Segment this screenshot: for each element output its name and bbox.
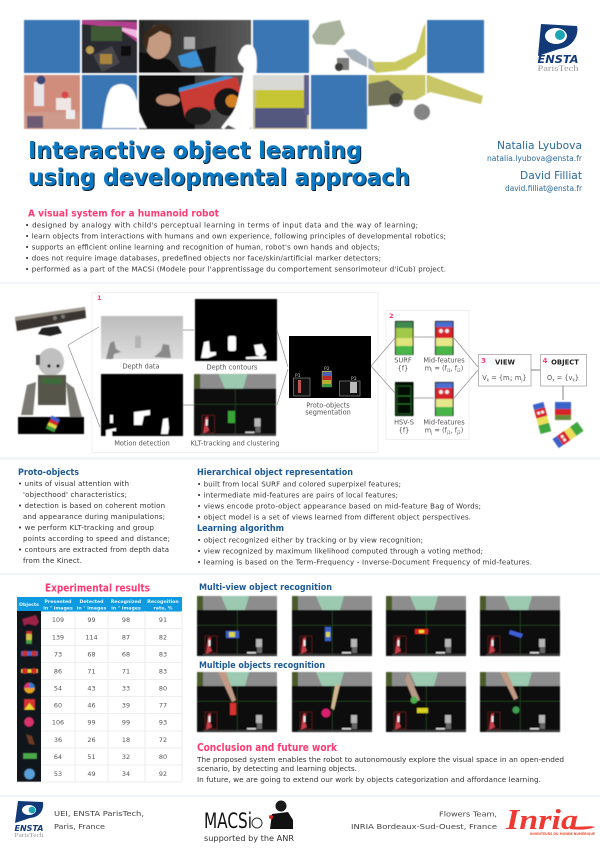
labels: mid-features i: i2 <box>457 368 461 373</box>
table values: 87 <box>122 634 130 642</box>
heading: experimental results: Experimental results <box>45 582 150 594</box>
footer text: Flowers team: INRIA Bordeaux-Sud-Ouest, France <box>351 822 498 831</box>
logo: ENSTA ParisTech top: ParisTech <box>538 63 579 73</box>
table values: 99 <box>87 616 96 624</box>
section: proto-objects <box>18 468 170 565</box>
table values: 72 <box>159 736 167 744</box>
image: KLT tracking <box>194 374 276 436</box>
table header <box>19 599 179 612</box>
label: KLT tracking: KLT-tracking and clustering <box>190 440 280 448</box>
table header: in ° images <box>77 606 106 612</box>
table values: 80 <box>159 684 167 692</box>
authors: david.filliat@ensta.fr <box>505 184 583 193</box>
labels: mid-features i: , f <box>451 364 458 372</box>
box 4: object: OBJECT <box>551 358 579 366</box>
table: experimental results <box>17 597 182 782</box>
box 3: view: ; m <box>511 374 521 382</box>
table header: Presented <box>44 599 72 605</box>
table values: 54 <box>54 684 62 692</box>
image: proto-objects segmentation <box>289 336 371 398</box>
table object icons <box>21 615 39 780</box>
table values: 83 <box>159 650 167 658</box>
panel number 2: 2 <box>389 312 394 320</box>
table header: rate, % <box>153 606 173 612</box>
box 3: view: k <box>487 378 490 382</box>
table values: 60 <box>54 702 62 710</box>
labels: SURF <box>394 356 412 372</box>
labels: HSV-S <box>394 418 414 434</box>
text: learning list: • object recognized either by tracking or by view recognition; <box>197 536 423 544</box>
footer text: UEI: Paris, France <box>54 822 105 831</box>
labels: mid-features j: Mid-features <box>423 418 465 426</box>
image: depth data <box>101 316 183 359</box>
text: proto-objects list: • detection is based on coherent motion <box>18 502 165 510</box>
table values <box>52 616 167 778</box>
table values: 109 <box>52 616 64 624</box>
image: HSV-S features <box>395 382 414 416</box>
table values: 64 <box>54 753 62 761</box>
text: representation list: • built from local SURF and colored superpixel features; <box>197 480 401 488</box>
text: proto-objects list: and appearance during manipulations; <box>23 513 165 521</box>
mosaic: robot photo tiles <box>139 20 251 129</box>
intro bullet list: • does not require image databases, predefined objects nor face/skin/artificial marker detectors; <box>25 254 381 262</box>
heading: multi-view object recognition: Multi-view object recognition <box>199 583 332 593</box>
section: hierarchical object representation <box>197 468 481 522</box>
label: proto-objects segmentation: segmentation <box>305 408 351 416</box>
labels: mid-features i: = (f <box>432 364 448 372</box>
box 4: object: 4 <box>542 357 548 365</box>
authors <box>487 140 583 193</box>
intro bullet list: • learn objects from interactions with humans and own experience, following principles of developmental robotics; <box>25 232 446 240</box>
box 3: view: j <box>520 378 522 382</box>
mosaic: humanoid robots photo <box>24 75 80 129</box>
table values: 36 <box>54 736 62 744</box>
text: conclusion <box>196 755 564 784</box>
labels: mid-features j: j <box>430 430 432 435</box>
text: proto-objects list: points according to speed and distance; <box>23 535 170 543</box>
text: proto-objects list: from the Kinect. <box>23 557 82 565</box>
labels: mid-features i: Mid-features <box>423 356 465 364</box>
box 4: object: } <box>575 374 579 382</box>
section: learning algorithm <box>197 524 532 566</box>
labels: mid-features j: m <box>425 426 431 434</box>
table header: Objects <box>19 602 39 608</box>
text: representation list <box>197 480 481 522</box>
table values: 51 <box>87 753 96 761</box>
header image mosaic <box>24 20 484 129</box>
labels: mid-features j: j2 <box>456 430 461 435</box>
label: depth contours: Depth contours <box>207 364 258 372</box>
footer logo: ENSTA ParisTech: ENSTA <box>14 824 44 833</box>
labels: HSV-S: HSV-S <box>394 418 414 426</box>
section: hierarchical object representation: Hierarchical object representation <box>197 468 353 478</box>
footer logo: Inria: Inria <box>505 804 578 836</box>
table values: 53 <box>54 770 62 778</box>
text: proto-objects list <box>18 480 170 565</box>
footer text: UEI: UEI, ENSTA ParisTech, <box>54 809 144 818</box>
heading: conclusion: Conclusion and future work <box>197 741 338 754</box>
label: motion detection: Motion detection <box>114 440 170 448</box>
table values: 68 <box>87 650 96 658</box>
table header: Detected <box>79 599 104 605</box>
table values: 26 <box>87 736 96 744</box>
box 3: view: i <box>509 378 511 382</box>
text: representation list: • views encode proto-object appearance based on mid-feature Bag of Words; <box>197 502 481 510</box>
table values: 92 <box>159 770 167 778</box>
labels: mid-features i: ) <box>461 364 463 372</box>
text: proto-objects list: 'objecthood' characteristics; <box>23 491 127 499</box>
label: proto-objects segmentation <box>305 402 351 416</box>
text: conclusion: scenario, by detecting and learning objects. <box>197 764 357 773</box>
text: proto-objects list: • contours are extracted from depth data <box>18 546 169 554</box>
footer text: UEI <box>54 809 144 831</box>
title: Interactive object learning <box>28 136 362 164</box>
table values: 43 <box>87 684 96 692</box>
photos: multi-view row <box>197 596 560 656</box>
table values: 99 <box>122 718 130 726</box>
table values: 91 <box>159 616 167 624</box>
title <box>28 136 411 192</box>
image: motion detection <box>101 374 183 436</box>
labels: SURF: SURF <box>394 356 412 364</box>
labels: mid-features j <box>423 418 465 435</box>
image: proto-objects segmentation: P2 <box>324 366 330 372</box>
table header: in ° images <box>43 606 73 612</box>
mosaic: electronics photo <box>82 20 137 73</box>
intro bullet list: • supports an efficient online learning and recognition of human, robot's own hands and objects; <box>25 244 380 252</box>
text: learning list: • view recognized by maximum likelihood computed through a voting method; <box>197 548 483 556</box>
labels: mid-features j: = (f <box>432 426 448 434</box>
image: depth contours <box>195 299 277 361</box>
logo: ENSTA ParisTech top: ENSTA <box>538 54 578 66</box>
authors: Natalia Lyubova <box>497 140 582 152</box>
footer logo: Inria <box>505 804 595 836</box>
image: proto-objects segmentation: P1 <box>295 373 301 379</box>
box 4: object: = {v <box>555 374 573 382</box>
mosaic: patterned graph <box>253 75 309 129</box>
authors: David Filliat <box>520 170 582 182</box>
box 3: view <box>478 354 531 386</box>
table values: 71 <box>87 668 96 676</box>
table values: 93 <box>159 718 167 726</box>
text: conclusion: In future, we are going to extend our work by objects categorization and affordance learning. <box>197 775 541 784</box>
section: proto-objects: Proto-objects <box>18 468 79 478</box>
intro bullet list: • performed as a part of the MACSi (Modele pour l'apprentissage du comportement sensorimoteur d'iCub) project. <box>25 266 446 274</box>
image: mid-features j <box>435 382 454 416</box>
box 3: view: = {m <box>489 374 509 382</box>
table values: 71 <box>122 668 130 676</box>
intro bullet list <box>25 222 446 274</box>
table values: 82 <box>159 634 167 642</box>
authors: natalia.lyubova@ensta.fr <box>487 154 583 163</box>
footer logo: MACSi: supported by the ANR <box>204 834 295 843</box>
image: proto-objects segmentation: P3 <box>351 376 357 382</box>
image: SURF features <box>395 321 414 355</box>
text: learning list: • learning is based on the Term-Frequency - Inverse-Document Frequency of mid-features. <box>197 558 532 566</box>
logo: ENSTA ParisTech top <box>538 24 579 73</box>
table values: 139 <box>52 634 64 642</box>
footer text: Flowers team <box>351 810 498 831</box>
table header: Recognized <box>111 599 141 605</box>
title: Interactive object learning <box>29 137 363 165</box>
table values: 46 <box>87 702 96 710</box>
table values: 86 <box>54 668 62 676</box>
table header: Recognition <box>147 599 179 605</box>
table values: 18 <box>122 736 130 744</box>
heading: visual system: A visual system for a humanoid robot <box>28 208 219 220</box>
table values: 39 <box>122 702 130 710</box>
footer text: Flowers team: Flowers Team, <box>439 810 497 818</box>
box 3: view: 3 <box>481 357 486 365</box>
table values: 99 <box>87 718 96 726</box>
box 4: object <box>540 354 586 386</box>
box 4: object: O <box>547 374 552 382</box>
title: using developmental approach <box>29 164 411 192</box>
table values: 77 <box>159 702 167 710</box>
labels: mid-features i: m <box>425 364 431 372</box>
icon: Kinect sensor <box>15 307 86 336</box>
box 3: view: VIEW <box>495 358 515 366</box>
mosaic: plane render <box>312 20 483 120</box>
icon: iCub robot <box>18 348 84 434</box>
labels: mid-features j: j1 <box>446 430 451 435</box>
section: learning algorithm: Learning algorithm <box>197 524 284 534</box>
labels: mid-features i <box>423 356 465 373</box>
table values: 73 <box>54 650 62 658</box>
footer logo: MACSi <box>204 800 295 843</box>
diagram: sensors <box>15 307 86 434</box>
table values: 83 <box>159 668 167 676</box>
arrows <box>68 327 563 427</box>
footer logo: MACSi: MACSi <box>204 809 252 833</box>
labels: mid-features j: , f <box>451 426 458 434</box>
labels: mid-features i: i <box>431 368 432 373</box>
box 4: object: k <box>572 378 575 382</box>
table values: 80 <box>159 753 167 761</box>
heading: multiple objects recognition: Multiple objects recognition <box>199 661 325 671</box>
footer logo: ENSTA ParisTech <box>14 801 44 839</box>
label: depth data: Depth data <box>122 362 160 370</box>
mosaic: silhouette of woman <box>221 45 258 129</box>
table values: 34 <box>122 770 130 778</box>
panel 2: features <box>386 310 469 440</box>
mosaic: silhouette of seated figures <box>102 84 147 128</box>
box 3: view: V <box>482 374 487 382</box>
labels: HSV-S: {f} <box>399 426 409 434</box>
image: tracked object views <box>533 402 584 448</box>
panel 1: proto-object segmentation <box>92 292 378 452</box>
footer logo: ENSTA ParisTech: ParisTech <box>14 833 44 839</box>
labels: mid-features j: ) <box>461 426 463 434</box>
panel number 1: 1 <box>97 294 102 302</box>
box 4: object: x <box>552 378 555 382</box>
intro bullet list: • designed by analogy with child's perceptual learning in terms of input data and the way of learning; <box>25 222 418 230</box>
label: proto-objects segmentation: Proto-objects <box>306 402 350 410</box>
text: proto-objects list: • we perform KLT-tracking and group <box>18 524 155 532</box>
table values: 114 <box>85 634 98 642</box>
photos: multiple objects row <box>197 672 560 732</box>
labels: mid-features i: i1 <box>447 368 451 373</box>
table header: in ° images <box>111 606 141 612</box>
text: learning list <box>197 536 532 566</box>
image: mid-features i <box>435 321 454 355</box>
labels: SURF: {f} <box>398 364 408 372</box>
title: using developmental approach <box>28 163 410 191</box>
text: proto-objects list: • units of visual attention with <box>18 480 129 488</box>
text: representation list: • object model is a set of views learned from different object perspectives. <box>197 514 471 522</box>
text: representation list: • intermediate mid-features are pairs of local features; <box>197 492 398 500</box>
text: conclusion: The proposed system enables the robot to autonomously explore the visual space in an open-ended <box>196 755 564 764</box>
table values: 98 <box>122 616 130 624</box>
table values: 68 <box>122 650 130 658</box>
table values: 32 <box>122 753 130 761</box>
table values: 49 <box>87 770 96 778</box>
mosaic: blue tiles <box>24 20 484 129</box>
table values: 106 <box>52 718 64 726</box>
box 3: view: } <box>522 374 527 382</box>
table values: 33 <box>122 684 130 692</box>
